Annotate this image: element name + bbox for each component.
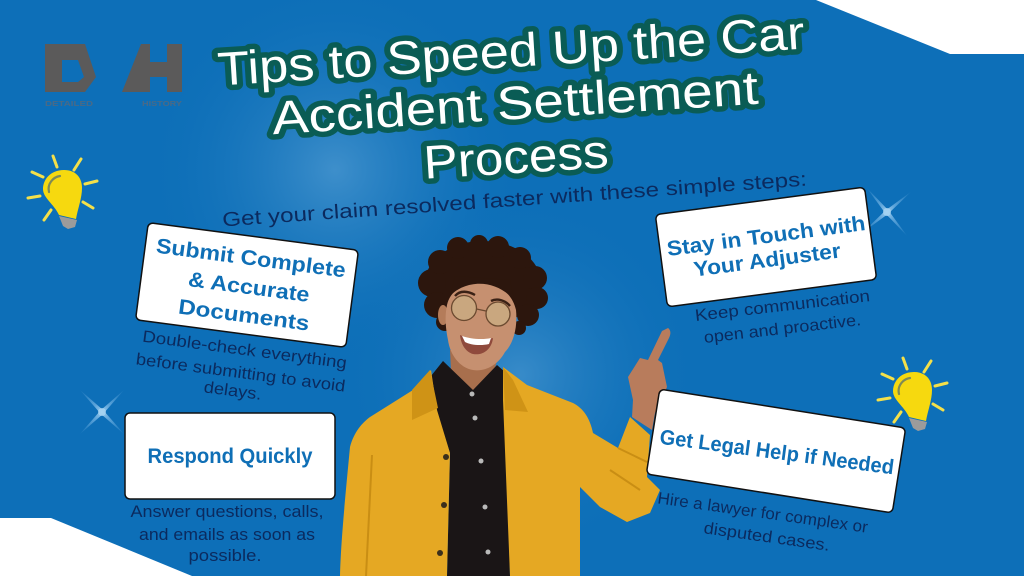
logo: HISTORY (142, 101, 182, 108)
card: submit documents: Documents (177, 296, 311, 336)
text: legal description (656, 489, 869, 555)
text: legal description: disputed cases. (703, 519, 831, 555)
sleeve fold (366, 448, 647, 576)
card: respond quickly (125, 413, 335, 499)
face (446, 282, 516, 370)
text: submit description: before submitting to avoid (135, 350, 346, 396)
card: submit documents: & Accurate (187, 268, 311, 307)
text: respond description: and emails as soon as (139, 526, 315, 544)
icon: light bulb right (878, 358, 947, 431)
card: legal help (646, 389, 906, 513)
glasses (452, 296, 510, 326)
neck (450, 350, 500, 392)
card: respond quickly: Respond Quickly (148, 445, 313, 468)
text: submit description (135, 328, 348, 404)
card: stay in touch: Stay in Touch with (666, 212, 867, 261)
title: Process (422, 124, 610, 189)
card: submit documents: Submit Complete (155, 235, 347, 282)
subtitle: Get your claim resolved faster with these simple steps: (222, 169, 808, 231)
jacket buttons (437, 454, 449, 556)
sparkle left (57, 367, 147, 457)
white corner top right (816, 0, 1024, 54)
text: submit description: Double-check everything (141, 328, 348, 372)
person (340, 235, 670, 576)
ears (438, 305, 448, 325)
logo: DETAILED (45, 101, 93, 108)
hand (628, 328, 670, 430)
eyebrows (455, 292, 510, 306)
text: respond description: Answer questions, calls, (130, 503, 324, 521)
text: respond description (130, 503, 324, 565)
card: legal help: Get Legal Help if Needed (658, 426, 895, 479)
mouth (460, 335, 493, 354)
title: Accident Settlement (270, 61, 760, 144)
text: stay description (694, 287, 871, 347)
sparkle top right (842, 167, 932, 257)
text: legal description: Hire a lawyer for complex or (656, 489, 869, 537)
shirt (431, 361, 510, 576)
hair (418, 235, 548, 335)
icon: light bulb left (28, 156, 97, 229)
title: Tips to Speed Up the Car (216, 6, 806, 95)
card: stay in touch: Your Adjuster (692, 239, 842, 282)
shirt buttons (470, 392, 490, 554)
hairline curl (450, 276, 514, 300)
text: stay description: Keep communication (694, 287, 871, 325)
white corner bottom left (0, 518, 192, 576)
card: submit documents (136, 223, 358, 347)
text: stay description: open and proactive. (703, 311, 862, 347)
logo (45, 44, 182, 108)
title (216, 6, 806, 189)
text: submit description: delays. (203, 378, 263, 404)
collar (412, 367, 528, 420)
text: respond description: possible. (188, 547, 262, 565)
jacket (340, 367, 660, 576)
card: stay in touch (655, 187, 877, 307)
